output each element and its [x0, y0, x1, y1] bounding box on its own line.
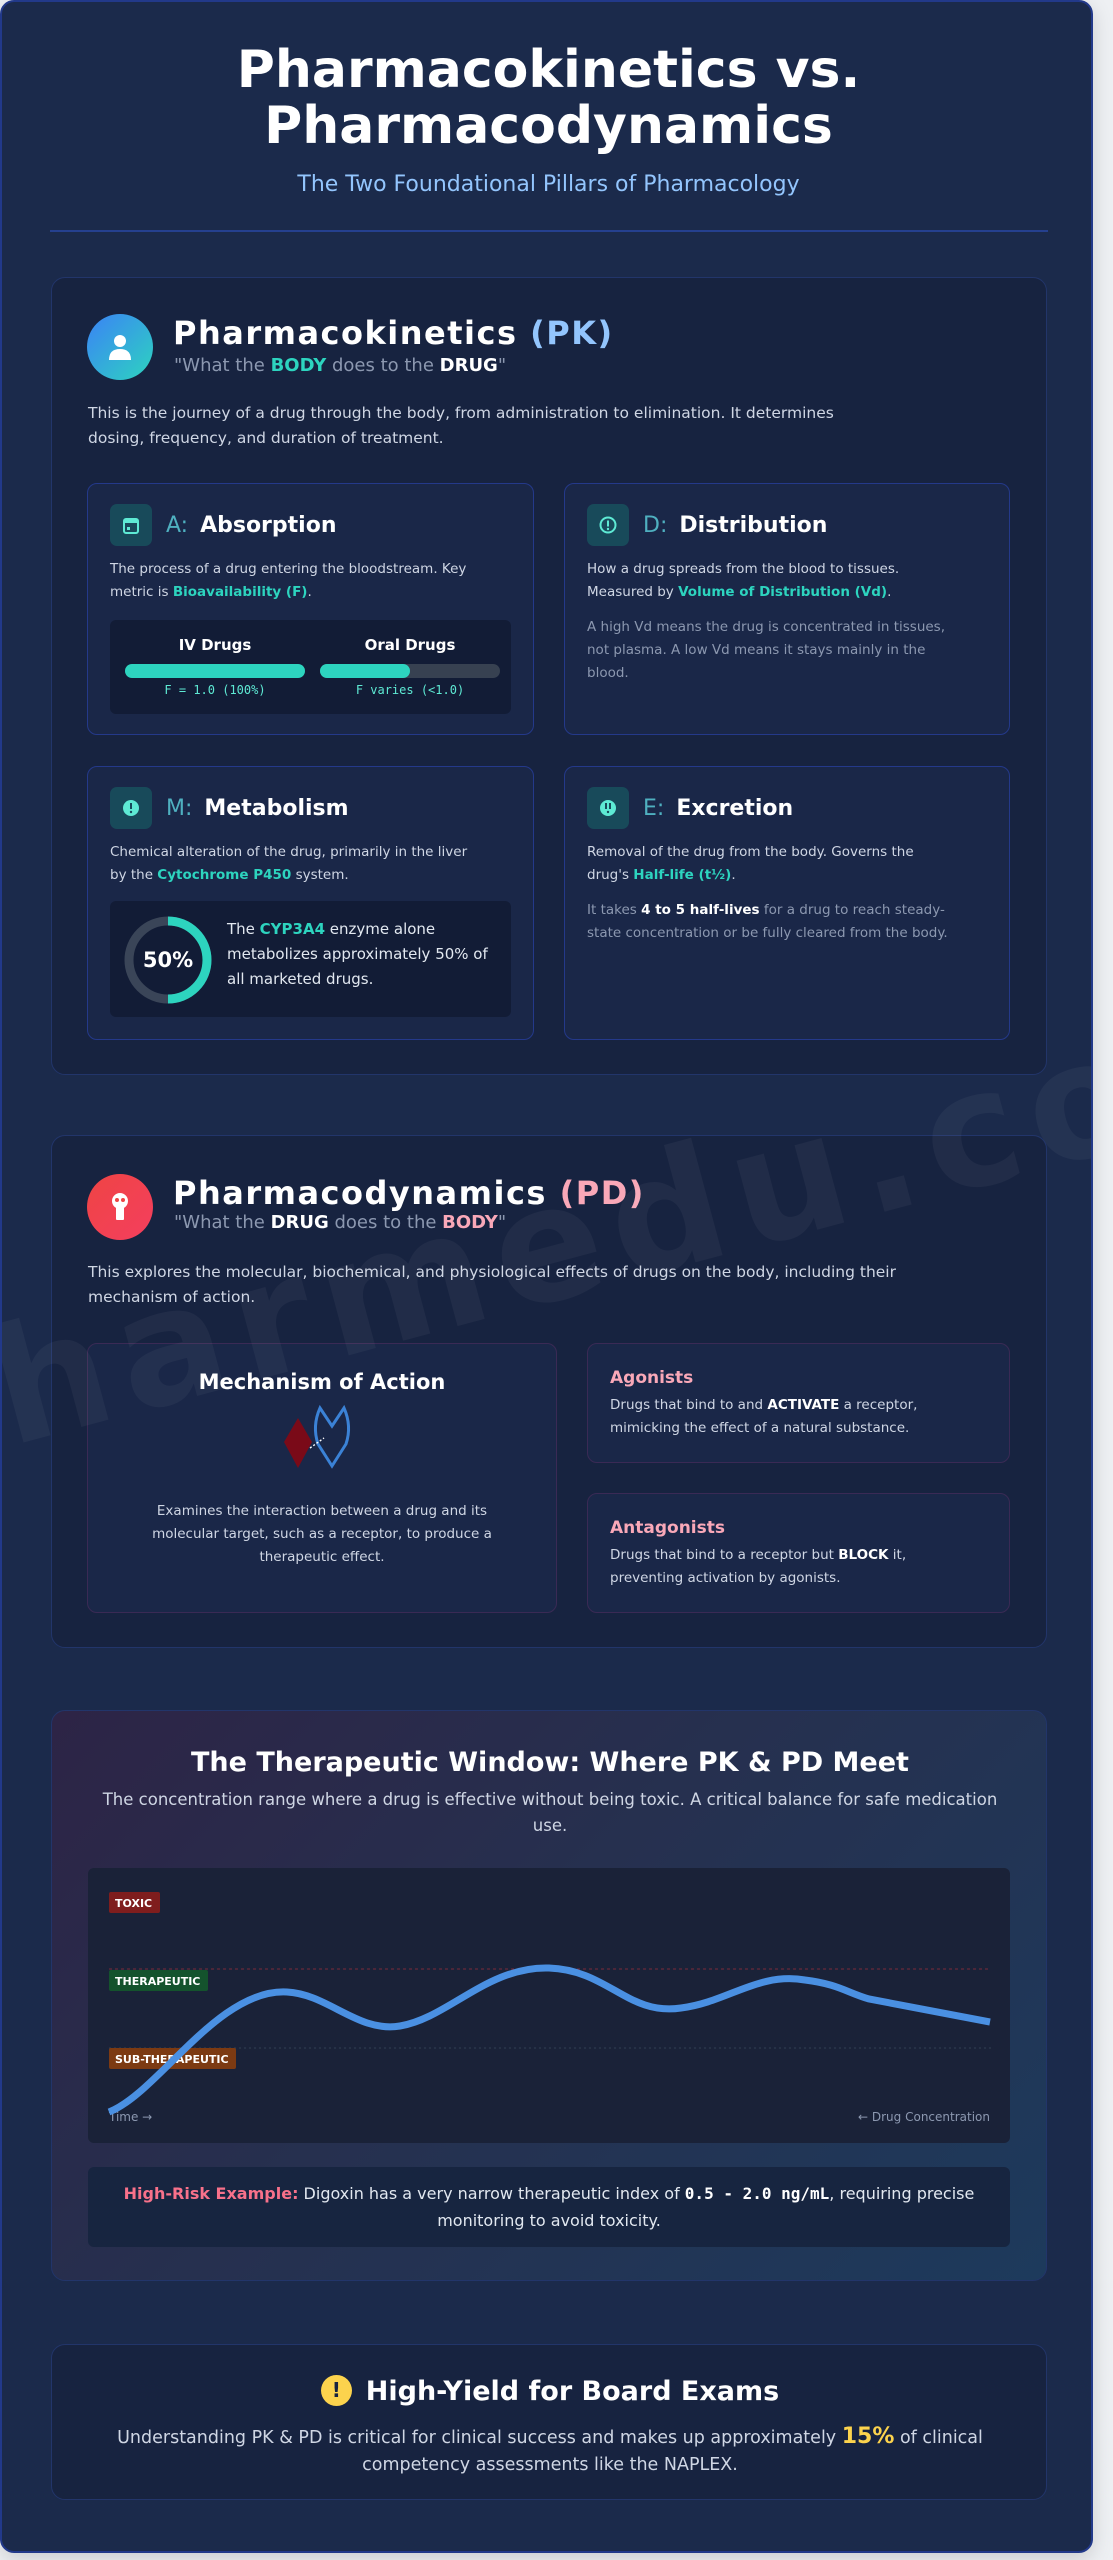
therapeutic title: The Therapeutic Window: Where PK & PD Meet [191, 1747, 909, 1778]
CYP3A4 donut: The CYP3A4 enzyme alone metabolizes approximately 50% of all marketed drugs. [227, 920, 488, 988]
bioavailability bars: IV Drugs [179, 636, 251, 654]
board title: High-Yield for Board Exams [366, 2376, 779, 2407]
chart: concentration curve: ← Drug Concentration [858, 2110, 990, 2124]
bioavailability bars: Oral Drugs [365, 636, 455, 654]
sub-therapeutic label: SUB-THERAPEUTIC [115, 2053, 229, 2066]
callout: digoxin: High-Risk Example: Digoxin has a very narrow therapeutic index of 0.5 - 2.0 ng/mL, requiring precise monitoring to avoid toxicity. [124, 2184, 974, 2230]
card: absorption: Absorption [200, 512, 336, 538]
card: excretion: Removal of the drug from the body. Governs the drug's Half-life (t½). [587, 844, 914, 883]
panel: pharmacodynamics [51, 1135, 1047, 1648]
board text: Understanding PK & PD is critical for clinical success and makes up approximately 15% of clinical competency assessments like the NAPLEX. [117, 2424, 983, 2475]
curve [109, 1968, 990, 2112]
title [237, 40, 860, 156]
sub-therapeutic label [109, 2048, 236, 2069]
card: excretion: Excretion [676, 796, 793, 820]
card: absorption: A: [166, 512, 188, 538]
card: mechanism of action: Examines the interaction between a drug and its molecular target, such as a receptor, to produce a therapeutic effect. [152, 1503, 492, 1565]
card: excretion: It takes 4 to 5 half-lives for a drug to reach steady-state concentration or be fully cleared from the body. [587, 902, 948, 941]
card: distribution [564, 483, 1010, 735]
therapeutic label [109, 1970, 208, 1991]
PD tagline: "What the DRUG does to the BODY" [174, 1212, 506, 1233]
icon: info [587, 504, 629, 546]
card: distribution: How a drug spreads from the blood to tissues. Measured by Volume of Distribution (Vd). [587, 561, 899, 600]
board title: ! [332, 2378, 341, 2402]
bioavailability bars: F = 1.0 (100%) [164, 683, 266, 697]
therapeutic label: THERAPEUTIC [115, 1975, 200, 1988]
toxic label [109, 1892, 160, 1913]
icon: excretion [587, 787, 629, 829]
panel: therapeutic window [51, 1710, 1047, 2281]
chart: concentration curve: Time → [108, 2110, 152, 2124]
card: metabolism: M: [166, 796, 192, 820]
card: mechanism of action: Mechanism of Action [199, 1370, 445, 1394]
icon: calendar [110, 504, 152, 546]
subtitle: The Two Foundational Pillars of Pharmacology [297, 172, 800, 197]
card: mechanism of action [87, 1343, 557, 1613]
icon: pd [87, 1174, 153, 1240]
PK description: This is the journey of a drug through the body, from administration to elimination. It determines dosing, frequency, and duration of treatment. [88, 404, 834, 447]
card: agonists: Agonists [610, 1368, 693, 1388]
bioavailability bars [110, 620, 511, 714]
card: agonists: Drugs that bind to and ACTIVATE a receptor, mimicking the effect of a natural substance. [610, 1397, 917, 1436]
card: metabolism [87, 766, 534, 1040]
card: antagonists: Drugs that bind to a receptor but BLOCK it, preventing activation by agonists. [610, 1547, 906, 1586]
callout: digoxin [88, 2167, 1010, 2247]
therapeutic description: The concentration range where a drug is effective without being toxic. A critical balance for safe medication use. [103, 1790, 997, 1835]
chart: concentration curve [88, 1868, 1010, 2143]
card: metabolism: Chemical alteration of the drug, primarily in the liver by the Cytochrome P450 system. [110, 844, 467, 883]
icon: drug-receptor [284, 1405, 350, 1469]
card: antagonists: Antagonists [610, 1518, 725, 1538]
PD description: This explores the molecular, biochemical, and physiological effects of drugs on the body, including their mechanism of action. [88, 1263, 896, 1306]
card: metabolism: Metabolism [204, 796, 349, 820]
PK heading: Pharmacokinetics (PK) [173, 314, 614, 352]
card: absorption [87, 483, 534, 735]
panel: board exams [51, 2344, 1047, 2500]
title: Pharmacodynamics [264, 96, 833, 156]
CYP3A4 donut [110, 901, 511, 1017]
PK tagline: "What the BODY does to the DRUG" [174, 355, 506, 376]
bioavailability bars: F varies (<1.0) [356, 683, 464, 697]
card: excretion [564, 766, 1010, 1040]
icon: person [87, 314, 153, 380]
toxic label: TOXIC [115, 1897, 152, 1910]
card: antagonists [587, 1493, 1010, 1613]
card: distribution: D: [643, 512, 667, 538]
card: absorption: The process of a drug entering the bloodstream. Key metric is Bioavailability (F). [110, 561, 466, 600]
card: distribution: Distribution [679, 512, 827, 538]
PD heading: Pharmacodynamics (PD) [173, 1174, 645, 1212]
icon: metabolism [110, 787, 152, 829]
card: distribution: A high Vd means the drug is concentrated in tissues, not plasma. A low Vd means it stays mainly in the blood. [587, 619, 945, 681]
CYP3A4 donut: 50% [143, 948, 193, 972]
panel: pharmacokinetics [51, 277, 1047, 1075]
title: Pharmacokinetics vs. [237, 40, 860, 100]
card: excretion: E: [643, 796, 664, 820]
card: agonists [587, 1343, 1010, 1463]
